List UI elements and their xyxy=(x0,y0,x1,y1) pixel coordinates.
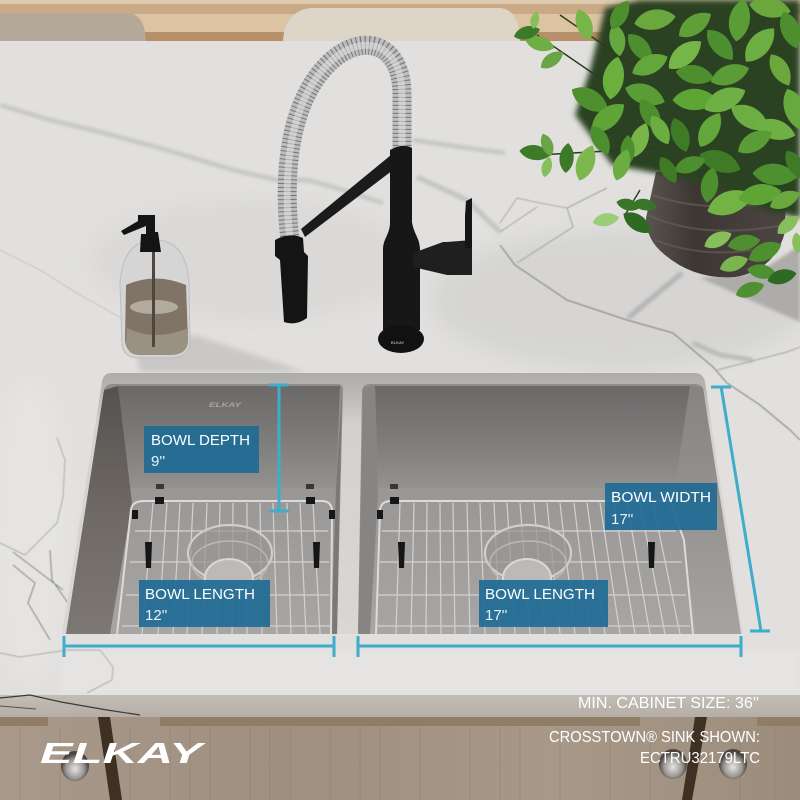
label: bowl width: BOWL WIDTH xyxy=(611,489,711,506)
right grate xyxy=(376,501,693,634)
faucet xyxy=(275,45,472,353)
left bowl: ELKAY xyxy=(209,403,243,409)
text: sink model: ECTRU32179LTC xyxy=(640,750,760,767)
soap dispenser xyxy=(120,215,190,358)
flexible hose xyxy=(287,45,402,240)
shadows on counter xyxy=(135,245,800,372)
spray head xyxy=(275,235,308,323)
body xyxy=(383,146,420,330)
label: bowl depth: 9'' xyxy=(151,453,165,470)
sink xyxy=(62,373,743,634)
leaves xyxy=(512,0,800,301)
label: left bowl length: 12'' xyxy=(145,607,168,624)
label: bowl width xyxy=(605,483,717,530)
fine marble veins xyxy=(0,188,800,693)
support arm xyxy=(301,155,397,237)
label: right bowl length: BOWL LENGTH xyxy=(485,586,595,603)
handle xyxy=(413,240,472,275)
dimension line: right bowl length xyxy=(358,636,741,657)
potted plant xyxy=(512,0,800,301)
stems xyxy=(537,15,660,215)
cabinet knobs xyxy=(61,749,747,781)
label: right bowl length: 17'' xyxy=(485,607,508,624)
text: sink model xyxy=(549,729,760,767)
left bowl xyxy=(66,384,343,634)
faucet base xyxy=(378,325,424,353)
countertop front edge xyxy=(0,695,800,717)
dimension line: bowl depth xyxy=(269,385,289,511)
background: wood wall and chairs xyxy=(0,0,800,42)
label: bowl width: 17'' xyxy=(611,511,634,528)
left grate xyxy=(117,501,332,634)
pot xyxy=(646,172,786,277)
label: right bowl length xyxy=(479,580,608,627)
right bowl xyxy=(358,384,741,634)
label: bowl depth: BOWL DEPTH xyxy=(151,432,250,449)
dimension line: left bowl length xyxy=(64,636,334,657)
foliage mass xyxy=(575,0,800,218)
label: bowl depth xyxy=(144,426,259,473)
label: left bowl length: BOWL LENGTH xyxy=(145,586,255,603)
faucet: ELKAY xyxy=(391,340,405,345)
logo: Elkay: ELKAY xyxy=(40,738,206,770)
text: sink model: CROSSTOWN® SINK SHOWN: xyxy=(549,729,760,746)
grate clips xyxy=(132,484,655,568)
sink rim xyxy=(62,373,743,634)
broad soft marble veins xyxy=(0,105,753,360)
cabinet doors xyxy=(0,717,800,800)
dimension line: bowl width xyxy=(711,386,770,631)
label: left bowl length xyxy=(139,580,270,627)
text: minimum cabinet size: MIN. CABINET SIZE: 36'' xyxy=(578,695,759,712)
